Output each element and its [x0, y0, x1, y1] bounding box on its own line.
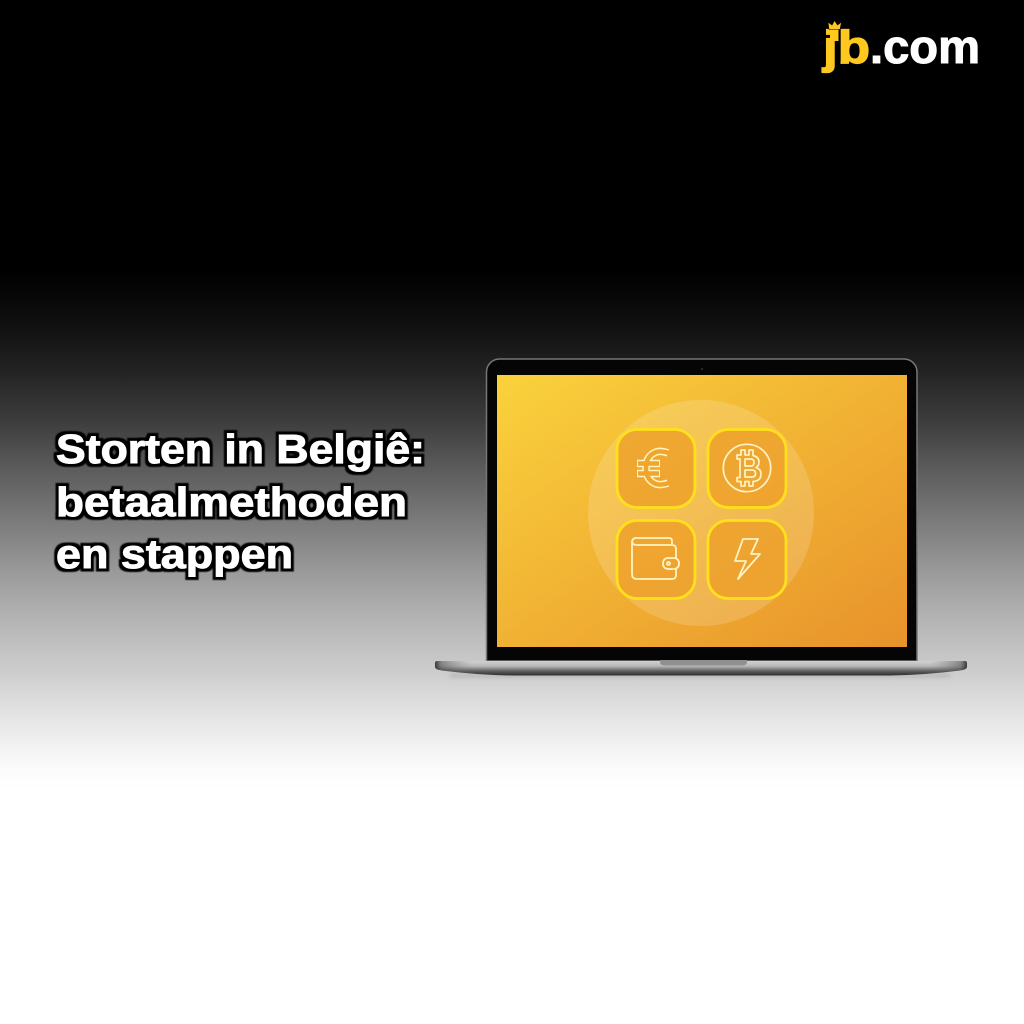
tile: bitcoin [708, 430, 786, 508]
laptop shadow [450, 674, 950, 677]
laptop [435, 359, 967, 677]
icon: lightning bolt [735, 539, 760, 579]
tile: lightning [708, 520, 786, 598]
laptop screen [497, 375, 907, 647]
logo: jb.com [822, 20, 980, 73]
icon backdrop circle [588, 400, 814, 626]
logo wordmark: jb [822, 21, 870, 73]
laptop notch [660, 660, 747, 666]
icon: euro [637, 451, 669, 485]
icon: crown [828, 20, 842, 30]
logo j stem bridge [830, 29, 838, 41]
title [56, 426, 425, 577]
laptop base [435, 661, 967, 676]
tile: euro [617, 430, 695, 508]
logo wordmark white part: .com [870, 20, 980, 73]
title: en stappen [56, 531, 293, 577]
title: betaalmethoden [56, 479, 407, 525]
icon: bitcoin [723, 444, 771, 492]
laptop lid [486, 359, 917, 661]
title: Storten in Belgiê: [56, 426, 425, 472]
tile: wallet [617, 520, 695, 598]
laptop camera [701, 368, 703, 370]
icon: wallet [632, 538, 679, 579]
